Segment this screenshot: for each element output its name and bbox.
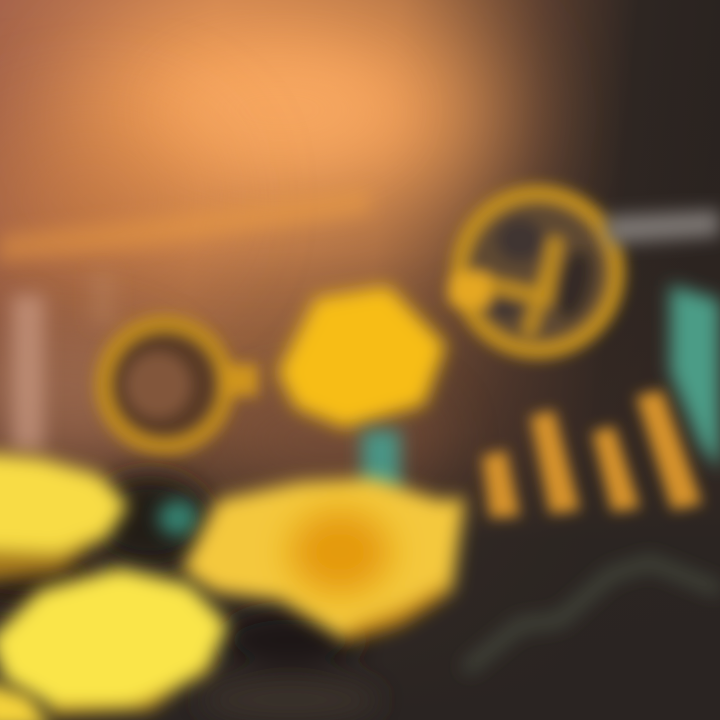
- teal accent between coins: [158, 500, 198, 536]
- dark shadow under coins: [0, 475, 380, 720]
- teal bar at right: [670, 285, 720, 470]
- coin: bottom left yellow: [0, 568, 228, 715]
- faint vertical bars at left: [12, 270, 116, 450]
- coin: top left yellow: [0, 452, 128, 582]
- faint line chart: [465, 562, 720, 670]
- icon: yellow hexagon: [278, 286, 446, 428]
- icon: gold ring with chart: [448, 193, 617, 351]
- coin: central gold gear: [182, 478, 465, 642]
- grey bar at top right: [606, 210, 720, 244]
- icon: coin ring at left: [103, 323, 258, 447]
- teal connector below hexagon: [362, 430, 400, 496]
- faint horizontal heading band: [0, 188, 370, 262]
- bar chart: orange slanted bars: [482, 390, 702, 518]
- coin: bottom corner fragment: [0, 680, 52, 720]
